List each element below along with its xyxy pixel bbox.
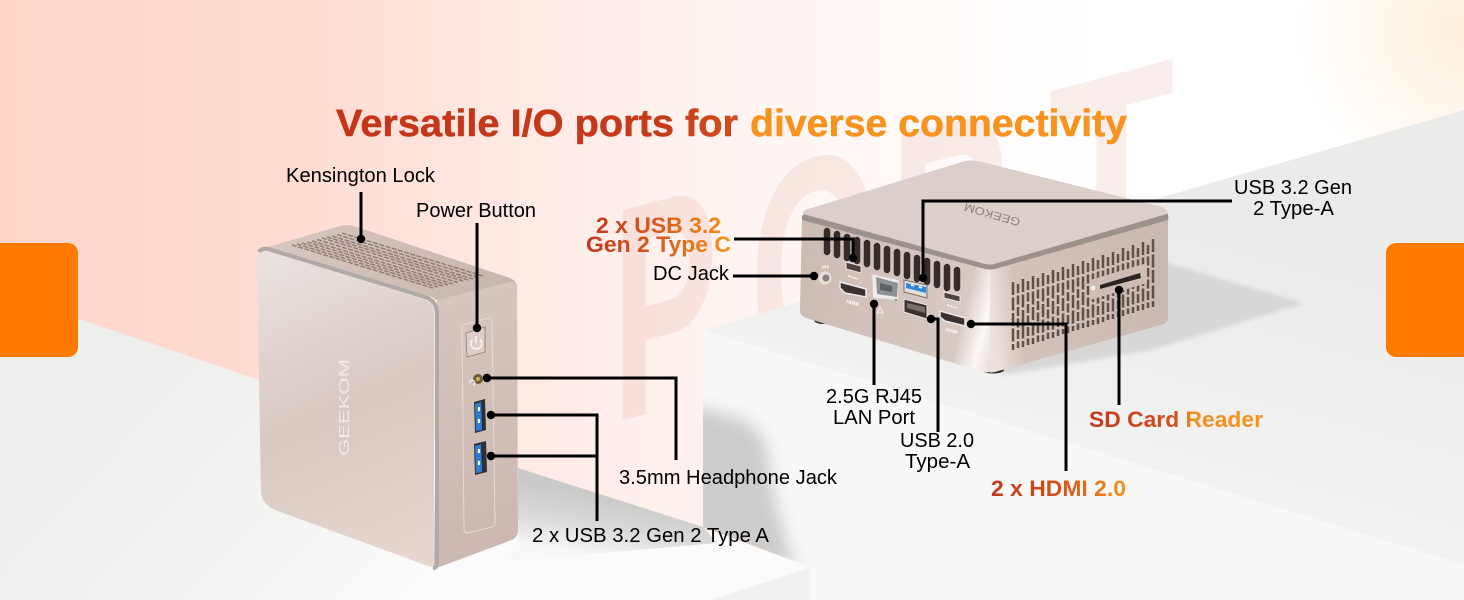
mini PC: vertical front view (257, 225, 518, 568)
right device shadow (990, 258, 1304, 375)
callout: 2.5G RJ45 LAN Port: 2.5G RJ45 (826, 386, 922, 408)
port: HDMI 2: HDMI (945, 327, 959, 336)
watermark: PORT: O (750, 76, 880, 452)
callout: 2.5G RJ45 LAN Port: LAN Port (833, 407, 915, 429)
title: Versatile I/O ports for (336, 103, 738, 145)
port: HDMI 2 (940, 311, 965, 336)
port: USB-C 2 (944, 292, 960, 308)
callout: 3.5mm Headphone Jack (483, 374, 838, 489)
watermark: PORT: P (612, 118, 718, 488)
callout: SD Card Reader: SD Card Reader (1089, 407, 1263, 432)
left platform (0, 292, 810, 600)
port: LAN RJ45 (872, 274, 899, 313)
callout: Power Button: Power Button (416, 200, 536, 222)
callout: 2 x USB 3.2 Gen 2 Type A (487, 411, 770, 547)
USB port 2 (474, 441, 487, 475)
device top face with vents (261, 225, 517, 300)
callout: 2.5G RJ45 LAN Port (826, 300, 922, 429)
device rim (259, 249, 437, 568)
callout: USB 3.2 Gen 2 Type-A: USB 3.2 Gen (1234, 177, 1352, 199)
callout: USB 3.2 Gen 2 Type-A (919, 177, 1352, 282)
callout: USB 2.0 Type-A (900, 315, 974, 473)
mini PC: rear angled view (800, 160, 1168, 374)
callout: 2 x USB 3.2 Gen 2 Type C (586, 213, 857, 262)
callout: USB 2.0 Type-A: USB 2.0 (900, 430, 974, 452)
orange tab: right (1386, 243, 1464, 357)
callout: DC Jack (653, 263, 818, 285)
callout: SD Card Reader (1089, 286, 1263, 432)
orange tab: left (0, 243, 78, 357)
callout: USB 3.2 Gen 2 Type-A: 2 Type-A (1253, 198, 1335, 220)
device feet (814, 316, 1153, 374)
callout: DC Jack: DC Jack (653, 263, 730, 285)
callout: Power Button (416, 200, 536, 332)
USB port 1 (474, 399, 486, 433)
callout: 2 x USB 3.2 Gen 2 Type C: Gen 2 Type C (586, 232, 731, 257)
title: diverse connectivity (750, 103, 1127, 145)
callout: Kensington Lock (286, 165, 436, 243)
callout: Kensington Lock: Kensington Lock (286, 165, 436, 187)
rear vents (827, 231, 957, 288)
callout: 2 x USB 3.2 Gen 2 Type C: 2 x USB 3.2 (596, 213, 721, 238)
headphone jack (470, 374, 483, 385)
device right face (990, 216, 1168, 372)
callout: 2 x HDMI 2.0: 2 x HDMI 2.0 (991, 476, 1126, 501)
device front face (257, 251, 434, 567)
callout: 2 x USB 3.2 Gen 2 Type A: 2 x USB 3.2 Gen 2 Type A (532, 525, 770, 547)
callout: 3.5mm Headphone Jack: 3.5mm Headphone Jack (619, 467, 838, 489)
brand: GEEKOM: GEEKOM (336, 359, 353, 456)
port: USB-C 1 (846, 262, 861, 279)
title (336, 103, 1127, 145)
port: USB 2.0 (904, 299, 927, 319)
watermark: PORT: R (890, 40, 1011, 414)
right platform (690, 110, 1464, 600)
callout: 2 x HDMI 2.0 (967, 320, 1126, 501)
port: HDMI 1: HDMI (846, 299, 860, 308)
device top with rim (802, 162, 1168, 270)
device left face (800, 216, 990, 372)
port: DC jack (818, 267, 832, 284)
port: USB 3.2 blue (904, 280, 927, 298)
side vents (1013, 239, 1153, 350)
watermark: PORT (612, 0, 1175, 488)
left device shadow (500, 468, 717, 562)
power button (466, 327, 485, 357)
port: HDMI 1 (840, 282, 866, 308)
device side face (434, 282, 518, 567)
watermark: PORT: T (1048, 0, 1175, 367)
brand: GEEKOM mirrored: GEEKOM (963, 200, 1022, 228)
callout: USB 2.0 Type-A: Type-A (905, 451, 971, 473)
side port panel (462, 318, 495, 533)
SD card slot (1090, 263, 1147, 300)
